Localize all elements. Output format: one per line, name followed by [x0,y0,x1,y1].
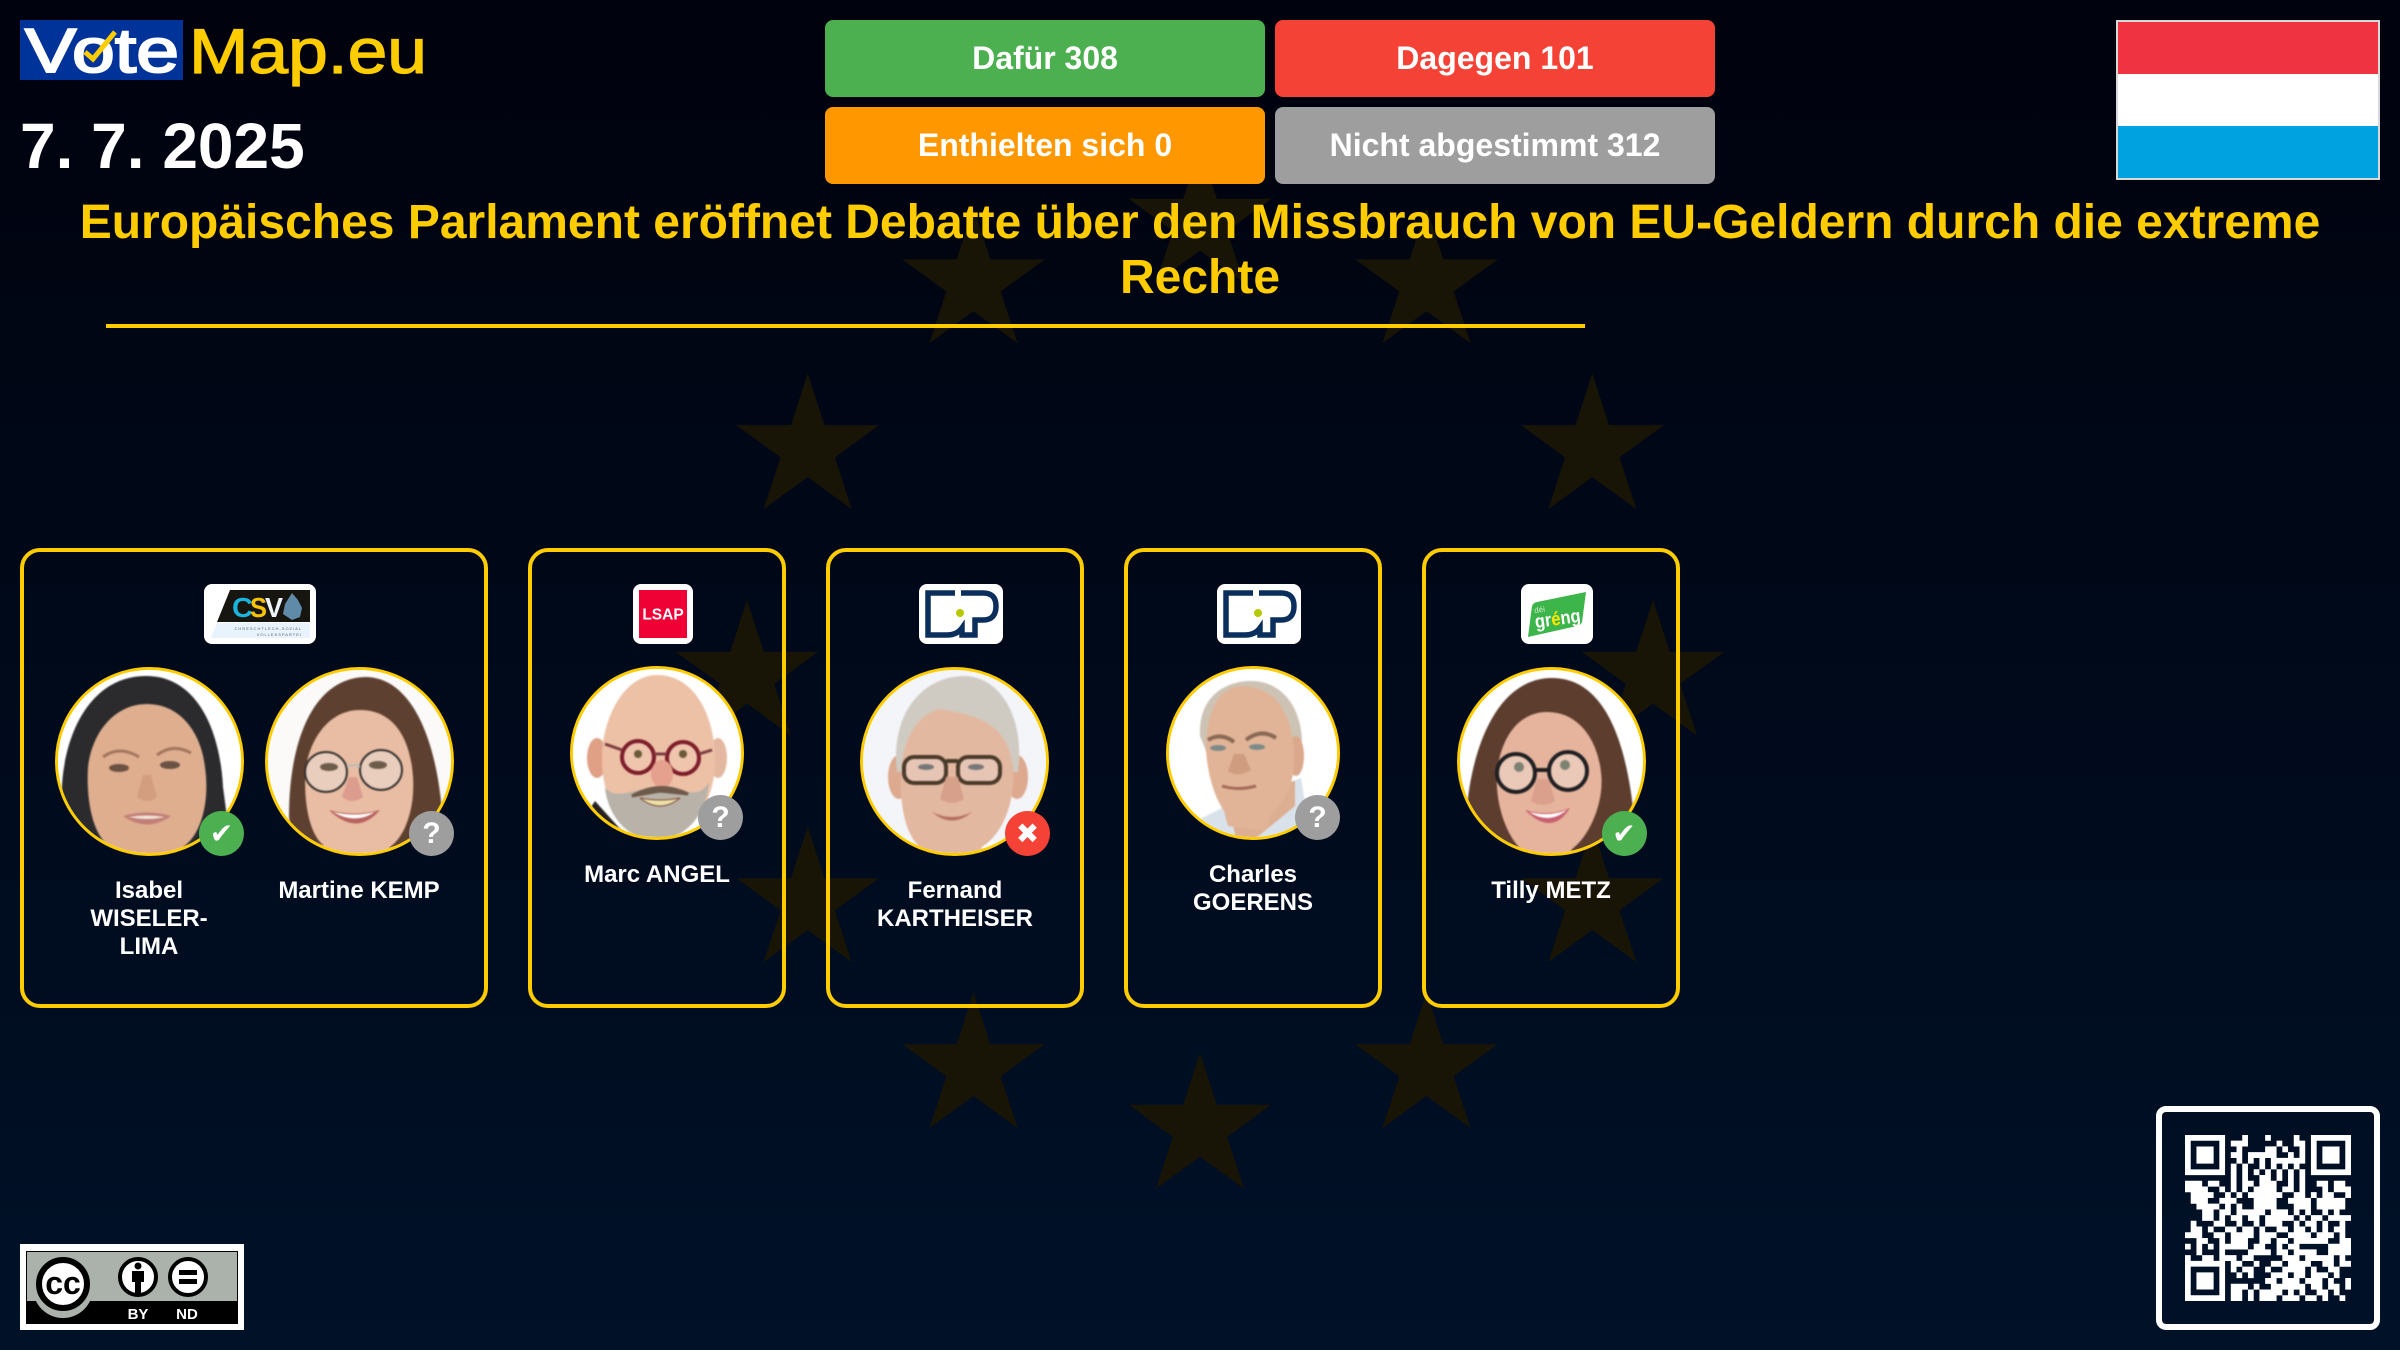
name: Charles Goerens [1193,861,1313,916]
photo: Martine Kemp [264,666,454,856]
name: Charles Goerens: Charles [1209,861,1297,888]
panel: DP 2 [1124,548,1382,1008]
vote result: abstained: Enthielten sich 0 [918,127,1172,163]
flag: Luxembourg [2116,20,2380,180]
name: Fernand Kartheiser: Fernand [908,877,1002,904]
name: Isabel Wiseler-Lima: WISELER- [90,905,208,932]
name: Tilly Metz: Tilly METZ [1491,877,1611,904]
panel: CSV [20,548,488,1008]
license badge: CC BY-ND: cc [45,1265,81,1301]
party logo: DP [1217,584,1301,644]
party logo: DP [919,584,1003,644]
title [80,196,2320,304]
photo: Charles Goerens [1166,666,1340,840]
party logo: déi gréng: gréng [1534,606,1582,633]
panel: déi gréng [1422,548,1680,1008]
license badge: CC BY-ND: ND [176,1306,198,1323]
party logo: CSV: V [265,592,283,623]
status: for: ✔ [1612,818,1636,849]
name: Fernand Kartheiser [877,877,1033,932]
name: Martine Kemp: Martine KEMP [278,877,440,904]
party logo: LSAP [633,584,693,644]
photo: Tilly Metz [1456,666,1646,856]
status: for [1602,811,1646,856]
vote result: against: Dagegen 101 [1396,40,1594,76]
status: did not vote [698,795,743,840]
photo: Marc Angel [570,666,744,840]
title underline [106,324,1585,328]
party logo: LSAP: LSAP [642,606,684,624]
title: Rechte [1120,251,1280,304]
name: Isabel Wiseler-Lima: Isabel [115,877,183,904]
name: Isabel Wiseler-Lima [90,877,208,960]
vote result: did not vote: Nicht abgestimmt 312 [1330,127,1660,163]
photo: Isabel Wiseler-Lima [54,666,244,856]
vote result: did not vote [1275,107,1715,184]
QR code [2156,1106,2380,1330]
name: Charles Goerens: GOERENS [1193,889,1313,916]
status: did not vote: ? [1308,800,1327,834]
party logo: CSV: S [250,592,267,623]
license badge: CC BY-ND [20,1244,244,1330]
panel: LSAP [528,548,786,1008]
party logo: CSV: C [232,592,253,623]
name: Isabel Wiseler-Lima: LIMA [120,933,178,960]
party logo: CSV [204,584,316,644]
party logo: CSV: CHRËSCHTLECH-SOZIAL [235,626,302,631]
name: Fernand Kartheiser: KARTHEISER [877,905,1033,932]
status: did not vote: ? [422,816,441,850]
vote result: for [825,20,1265,97]
vote result: for: Dafür 308 [972,40,1118,76]
vote result: against [1275,20,1715,97]
status: did not vote [1295,795,1340,840]
status: did not vote: ? [711,800,730,834]
status: against: ✖ [1016,818,1039,849]
status: against [1005,811,1050,856]
name: Marc Angel: Marc ANGEL [584,861,730,888]
date: 7. 7. 2025 [20,110,305,182]
party logo: déi gréng [1521,584,1593,644]
party logo: déi gréng: déi [1534,605,1546,615]
photo: Fernand Kartheiser [860,666,1049,856]
panel: DP 1 [826,548,1084,1008]
title: Europäisches Parlament eröffnet Debatte über den Missbrauch von EU-Geldern durch die extreme [80,196,2320,249]
vote result: abstained [825,107,1265,184]
status: for [199,811,244,856]
logo: VoteMap.eu [20,20,427,87]
status: for: ✔ [210,818,233,849]
party logo: CSV: VOLLEKSPARTEI [257,632,302,637]
status: did not vote [409,811,454,856]
license badge: CC BY-ND: BY [128,1306,148,1323]
